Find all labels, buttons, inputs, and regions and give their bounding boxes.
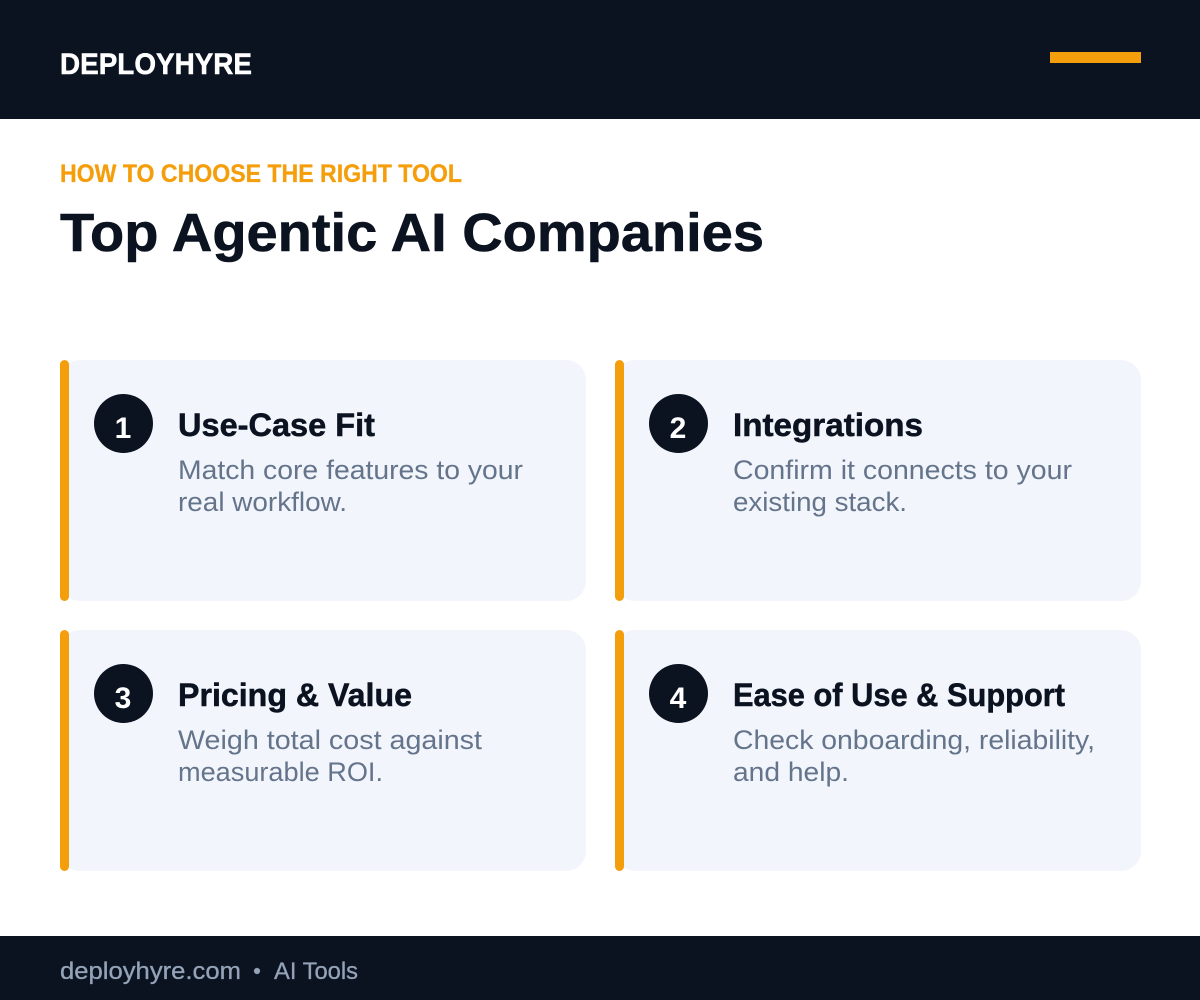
card description: Confirm it connects to your bbox=[733, 455, 1072, 485]
card description: real workflow. bbox=[178, 487, 347, 517]
footer text bbox=[60, 958, 358, 985]
icon: number 2: 2 bbox=[670, 412, 686, 445]
card description: Check onboarding, reliability, bbox=[733, 725, 1095, 755]
brand name: DEPLOYHYRE bbox=[60, 48, 252, 81]
card description: and help. bbox=[733, 757, 849, 787]
title: Top Agentic AI Companies bbox=[60, 203, 764, 263]
card description bbox=[178, 725, 483, 787]
accent bar bbox=[1050, 52, 1141, 63]
footer text: AI Tools bbox=[274, 958, 358, 985]
icon: number 4 bbox=[649, 664, 708, 723]
icon: number 3 bbox=[94, 664, 153, 723]
card description: Match core features to your bbox=[178, 455, 523, 485]
eyebrow heading: HOW TO CHOOSE THE RIGHT TOOL bbox=[60, 160, 462, 188]
card heading: Use-Case Fit bbox=[178, 407, 375, 443]
card heading: Pricing & Value bbox=[178, 677, 412, 713]
icon: number 1: 1 bbox=[115, 412, 131, 445]
icon: number 4: 4 bbox=[670, 682, 687, 715]
icon: number 3: 3 bbox=[115, 682, 131, 715]
header band bbox=[0, 0, 1200, 119]
panel: integrations bbox=[615, 360, 1141, 601]
card heading: Ease of Use & Support bbox=[733, 677, 1065, 713]
panel: pricing and value bbox=[60, 630, 586, 871]
card description bbox=[733, 725, 1095, 787]
card description: Weigh total cost against bbox=[178, 725, 483, 755]
card description: existing stack. bbox=[733, 487, 907, 517]
card heading: Integrations bbox=[733, 407, 923, 443]
icon: number 1 bbox=[94, 394, 153, 453]
card description bbox=[178, 455, 523, 517]
card description: measurable ROI. bbox=[178, 757, 383, 787]
footer band bbox=[0, 936, 1200, 1000]
card description bbox=[733, 455, 1072, 517]
icon: number 2 bbox=[649, 394, 708, 453]
footer text: deployhyre.com bbox=[60, 958, 241, 985]
panel: use-case fit bbox=[60, 360, 586, 601]
panel: ease of use and support bbox=[615, 630, 1141, 871]
